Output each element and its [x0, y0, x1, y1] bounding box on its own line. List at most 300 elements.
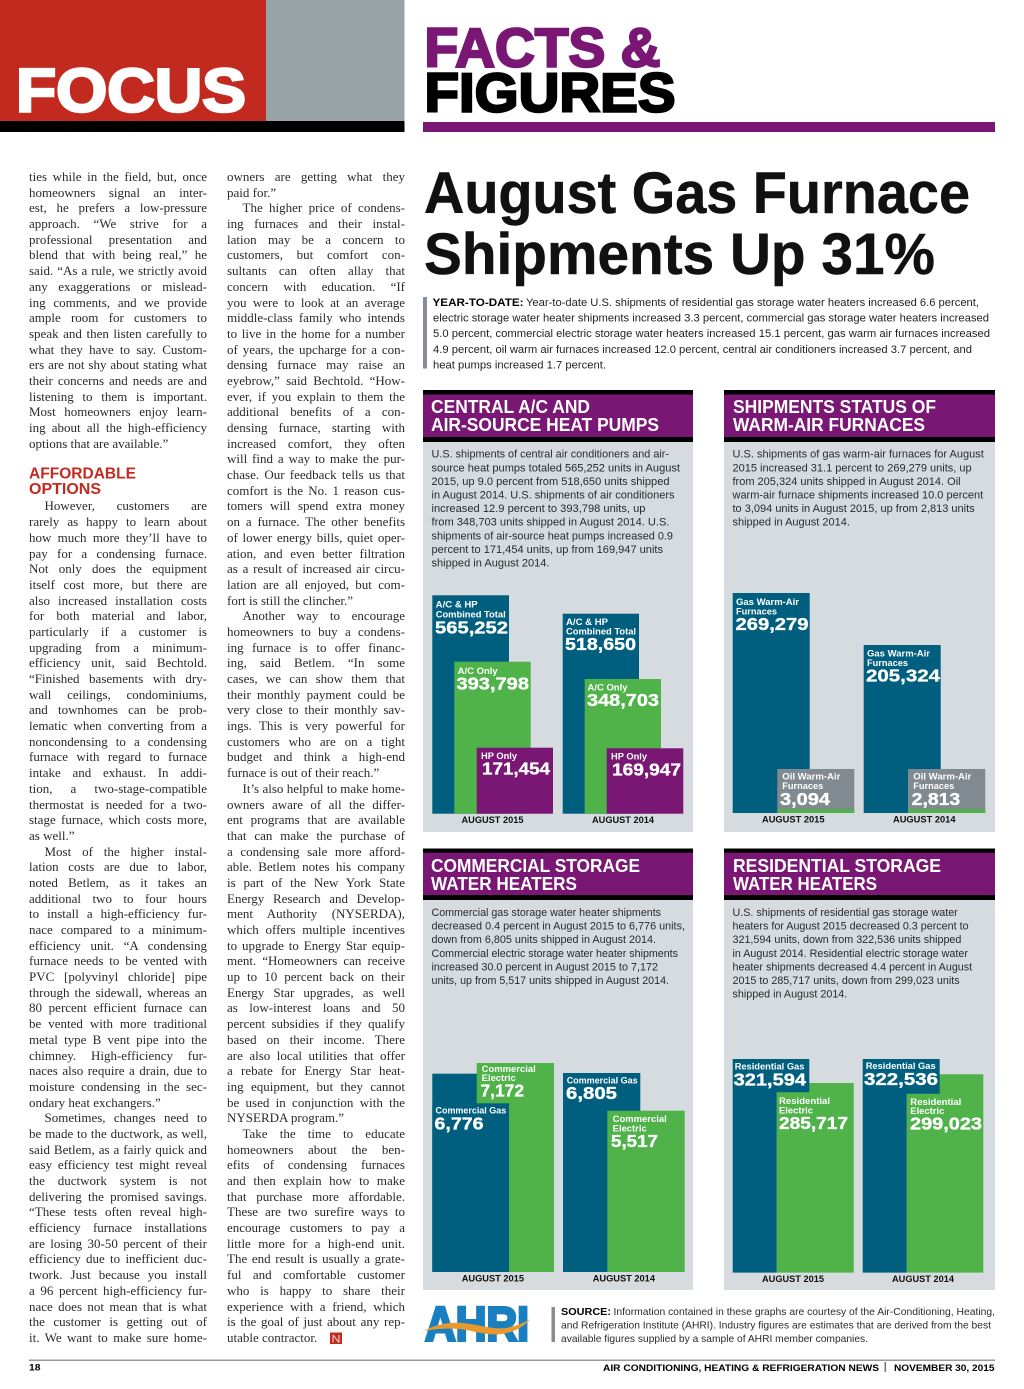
bar: HP only 2015: 171,454	[482, 758, 550, 778]
article text: column two: ment. “Homeowners can receive	[227, 953, 405, 968]
panel heading: central A/C	[423, 390, 693, 442]
bar: oil warm-air 2014	[908, 769, 985, 813]
bar: A/C only 2014: A/C Only	[588, 681, 628, 692]
article text: column two: additional benefits of a con-	[227, 404, 405, 419]
article text: column one: options that are available.”	[29, 436, 168, 451]
bar chart: August 2015 residential	[733, 1059, 854, 1284]
article text: column two: densing furnace, starting with	[227, 420, 405, 435]
article text: column two: Energy Research and Develop-	[227, 891, 405, 906]
article text: column two: very close to their monthly sav-	[227, 702, 405, 717]
bar: HP only 2015: HP Only	[481, 750, 518, 761]
subheading: Affordable Options: OPTIONS	[29, 481, 101, 498]
article text: column one: ing comments, and we provide	[29, 294, 207, 310]
article text: column two: of lower energy bills, quiet oper-	[227, 530, 405, 545]
title: August Gas Furnace	[424, 161, 970, 226]
article text: column two: paid for.”	[227, 185, 276, 200]
article text: column one: metal type B vent pipe into the	[29, 1032, 207, 1047]
article text: column one: as well.”	[29, 828, 74, 843]
article text: column two: utable contractor.	[227, 1330, 317, 1345]
panel heading: commercial storage: COMMERCIAL STORAGE	[431, 855, 640, 876]
article text: column two: to live in the home for a number	[227, 326, 405, 341]
article text: column one: Most homeowners enjoy learn-	[29, 404, 207, 419]
logo: AHRI: AHRI	[425, 1298, 529, 1352]
panel: central A/C and air-source heat pumps	[423, 390, 693, 832]
article text: column two: tomers will spend extra money	[227, 498, 405, 513]
article text: column two: ing furnace is to offer financ-	[227, 640, 405, 655]
article text: column one: delivering the promised savings.	[29, 1189, 207, 1204]
article text: column two: Another way to encourage	[242, 608, 405, 623]
article text: column one: pay for a condensing furnace.	[29, 546, 207, 561]
panel text: central A/C: in August 2014. U.S. shipments of air conditioners	[432, 490, 675, 502]
bar: residential electric 2015: 285,717	[779, 1113, 848, 1133]
text block: year-to-date summary: electric storage water heater shipments increased 3.3 percent, commercial gas storage water heaters increased	[433, 313, 989, 325]
panel text: central A/C: from 348,703 units shipped in August 2014. U.S.	[432, 517, 670, 529]
article text: column two: ful and comfortable customer	[227, 1267, 405, 1282]
bar: residential electric 2014: Residential	[910, 1096, 961, 1107]
bar chart: August 2015 furnaces: AUGUST 2015	[762, 813, 824, 824]
article text: column one: moisture condensing in the sec-	[29, 1079, 207, 1094]
article text: column two: as a result of increased air circu-	[227, 561, 405, 576]
article text: column two: ever, if you explain to them the	[227, 389, 405, 404]
panel text: central A/C: shipments of air-source heat pumps increased 0.9	[432, 530, 673, 542]
bar: gas warm-air 2014: 205,324	[866, 666, 940, 686]
article text: column one: wall ceilings, condominiums,	[29, 687, 207, 702]
panel text: commercial storage: Commercial electric storage water heater shipments	[432, 948, 678, 960]
article text: column one: the customer is getting out of	[29, 1314, 207, 1329]
article text: column one: efficiency unit, said Bechtold.	[29, 655, 207, 670]
article text: column two: ing furnaces and their instal-	[227, 216, 405, 231]
panel text: central A/C	[432, 449, 680, 570]
article text: column one: stage furnace, which costs more,	[29, 812, 207, 827]
text block: source note: Information contained in these graphs are courtesy of the Air-Conditioning, Heating,	[614, 1306, 995, 1318]
article text: column two: The end result is usually a grate-	[227, 1251, 405, 1266]
article text: column one: nace does not mean that is what	[29, 1299, 207, 1314]
article text: column two: sultants can often allay that	[227, 263, 405, 278]
panel text: residential storage: heaters for August 2015 decreased 0.3 percent to	[732, 921, 969, 933]
panel text: commercial storage: decreased 0.4 percent in August 2015 to 6,776 units,	[432, 921, 685, 933]
panel heading: residential storage: RESIDENTIAL STORAGE	[733, 855, 941, 876]
bar: A/C only 2014: 348,703	[587, 690, 659, 710]
article text: column one: lation costs are due to labor,	[29, 859, 207, 874]
panel text: warm-air furnaces: to 3,094 units in August 2015, up from 2,813 units	[732, 503, 975, 515]
article text: column two: ing, said Betlem. “In some	[227, 655, 405, 670]
panel text: warm-air furnaces: 2015 increased 31.1 percent to 269,279 units, up	[732, 462, 972, 474]
bar chart: August 2015 A/C and heat pumps	[432, 595, 553, 825]
text block: year-to-date summary	[423, 297, 990, 371]
article text: column two: ings. This is very powerful for	[227, 718, 405, 733]
bar: residential electric 2014: 299,023	[910, 1114, 982, 1134]
panel text: warm-air furnaces: warm-air furnace shipments increased 10.0 percent	[732, 490, 983, 502]
article text: column one: rarely as happy to learn about	[29, 514, 207, 529]
article text: column two: efits of condensing furnaces	[227, 1157, 405, 1172]
article text: column one: “These tests often reveal high-	[29, 1204, 207, 1219]
panel text: central A/C: source heat pumps totaled 565,252 units in August	[432, 462, 680, 474]
article text: column two: little more for a high-end unit.	[227, 1236, 405, 1251]
article text: column two: based on their income. There	[227, 1032, 405, 1047]
panel text: central A/C: shipped in August 2014.	[432, 558, 550, 570]
panel text: residential storage: in August 2014. Residential electric storage water	[732, 948, 968, 960]
article text: column one: to install a high-efficiency fur-	[29, 906, 207, 921]
bar: A/C only 2015	[454, 662, 531, 814]
article text: column one: PVC [polyvinyl chloride] pipe	[29, 969, 207, 984]
bar: commercial electric 2014: Commercial	[613, 1113, 667, 1124]
bar: HP only 2014: 169,947	[612, 760, 681, 780]
article text: column one: blend that with being real,” he	[29, 247, 207, 262]
article text: column one: Most of the higher instal-	[44, 844, 207, 859]
article text: column one: any exaggerations or mislead-	[29, 279, 207, 294]
text block: year-to-date summary: YEAR-TO-DATE:	[432, 297, 524, 309]
article text: column two: who is happy to share their	[227, 1283, 405, 1298]
text block: source note	[552, 1306, 995, 1345]
article text: column two: on a furnace. The other benefits	[227, 514, 405, 529]
article text: column two: owners aware of all the differ-	[227, 796, 405, 812]
article text: column one: what they have to say. Custom-	[29, 342, 207, 357]
article text: column two: It’s also helpful to make home-	[242, 781, 405, 796]
heading: Facts & Figures: FIGURES	[424, 62, 676, 124]
panel heading: residential storage: WATER HEATERS	[733, 873, 877, 894]
article text: column two: densing furnace may raise an	[227, 357, 405, 372]
article text: column two: their monthly payment could be	[227, 687, 405, 702]
article text: column one: for both material and labor,	[29, 608, 207, 623]
article text: column two: a condensing sale more afford-	[227, 844, 405, 859]
article text: column one: listening to them is important.	[29, 389, 207, 404]
bar: residential gas 2015	[733, 1059, 809, 1273]
article text: column two: to upgrade to Energy Star equip-	[227, 938, 405, 953]
article text: column one: ondary heat exchangers.”	[29, 1095, 161, 1110]
bar: oil warm-air 2015: 3,094	[780, 789, 830, 809]
article text: column one: tion, a two-stage-compatible	[29, 781, 207, 796]
article text: column two: ent programs that are available	[227, 812, 405, 827]
bar: commercial electric 2014: 5,517	[611, 1131, 658, 1151]
title: Shipments Up 31%	[424, 222, 935, 287]
bar: A/C and HP combined 2014	[563, 614, 639, 814]
bar: gas warm-air 2015: Furnaces	[736, 605, 777, 616]
bar: A/C and HP combined 2014: Combined Total	[566, 626, 636, 637]
article text: column one: be made to the ductwork, as well,	[29, 1126, 207, 1141]
heading: Facts & Figures: FACTS &	[424, 16, 660, 78]
bar: residential gas 2015: Residential Gas	[735, 1061, 804, 1072]
panel text: commercial storage: Commercial gas storage water heater shipments	[432, 907, 661, 919]
article text: column two: be used in conjunction with the	[227, 1095, 405, 1110]
article text: column one: be vented with more traditional	[29, 1016, 207, 1031]
bar chart: August 2014 commercial: AUGUST 2014	[593, 1272, 656, 1283]
panel text: warm-air furnaces: U.S. shipments of gas warm-air furnaces for August	[732, 449, 984, 461]
article text: column two: NYSERDA program.”	[227, 1110, 344, 1125]
article text: column two: Take the time to educate	[242, 1126, 405, 1141]
text block: year-to-date summary: heat pumps increased 1.7 percent.	[433, 359, 606, 371]
article text: column one: ing about all the high-efficiency	[29, 420, 207, 435]
article text: column one: ers are not shy about stating what	[29, 357, 207, 372]
footer: page number and publication line	[29, 1360, 995, 1373]
panel text: central A/C: increased 12.9 percent to 393,798 units, up	[432, 503, 646, 515]
article text: column one: the ductwork system is not	[29, 1173, 207, 1188]
article text: column two: encourage customers to pay a	[227, 1220, 405, 1235]
article text: column two: homeowners about the ben-	[227, 1142, 405, 1157]
panel text: residential storage: 321,594 units, down from 322,536 units shipped	[732, 934, 961, 946]
panel heading: central A/C: AIR-SOURCE HEAT PUMPS	[431, 414, 659, 435]
bar chart: August 2014 furnaces	[864, 645, 985, 824]
panel text: central A/C: 2015, up 9.0 percent from 518,650 units shipped	[432, 476, 670, 488]
text block: year-to-date summary: 4.9 percent, oil warm air furnaces increased 12.0 percent, central air conditioners increased 3.7 percent, and	[433, 344, 972, 356]
article text: column two: and then explain how to make	[227, 1173, 405, 1188]
article text: column one: particularly if a customer is	[29, 624, 207, 639]
bar: commercial gas 2014: 6,805	[566, 1083, 617, 1103]
panel text: warm-air furnaces	[732, 449, 984, 529]
article text: column one: also increased installation costs	[29, 593, 207, 608]
text block: year-to-date summary: 5.0 percent, commercial electric storage water heaters increased 15.1 percent, gas warm air furnaces increased	[433, 328, 990, 340]
article text: column one: thermostat is needed for a two-	[29, 797, 207, 812]
article text: column one: efficiency furnace installations	[29, 1220, 207, 1235]
bar: oil warm-air 2014: Oil Warm-Air	[913, 770, 972, 781]
article text: column one: said Betlem, as a fairly quick and	[29, 1142, 207, 1157]
footer: page number and publication line: AIR CONDITIONING, HEATING & REFRIGERATION NEWS	[603, 1362, 879, 1373]
panel text: residential storage: 2015 to 285,717 units, down from 299,023 units	[732, 975, 960, 987]
article text: column two: cases, we can show them that	[227, 671, 405, 686]
bar: A/C and HP combined 2015	[432, 595, 509, 814]
article text: column two: you were to look at an average	[227, 294, 405, 310]
bar: commercial gas 2014	[563, 1073, 640, 1272]
bar: HP only 2014: HP Only	[611, 751, 648, 762]
article text: column two: These are two surefire ways to	[227, 1204, 405, 1219]
bar: gas warm-air 2014: Gas Warm-Air	[867, 648, 930, 659]
bar: commercial electric 2014	[607, 1111, 685, 1272]
bar: commercial gas 2015	[432, 1103, 509, 1272]
subheading: Affordable Options	[29, 465, 136, 498]
text block: source note: available figures supplied by a sample of AHRI member companies.	[561, 1333, 868, 1345]
panel heading: residential storage	[724, 848, 995, 900]
panel: residential storage water heaters	[724, 848, 995, 1290]
panel text: warm-air furnaces: shipped in August 2014.	[732, 517, 850, 529]
heading: Facts & Figures	[423, 16, 995, 132]
article text: column two: middle-class family who intends	[227, 310, 405, 325]
bar: commercial electric 2015: Electric	[482, 1072, 516, 1083]
bar: A/C and HP combined 2014: 518,650	[565, 634, 636, 654]
bar chart: August 2014 residential	[863, 1059, 983, 1284]
panel text: residential storage: heater shipments decreased 4.4 percent in August	[732, 961, 972, 973]
panel text: warm-air furnaces: from 205,324 units shipped in August 2014. Oil	[732, 476, 961, 488]
article text: column one: said. “As a rule, we strictly avoid	[29, 263, 207, 278]
article text: column one: efficiency due to inefficient duc-	[29, 1251, 207, 1266]
article text: column two: will find a way to make the pur-	[227, 451, 405, 466]
footer: page number and publication line: NOVEMBER 30, 2015	[894, 1362, 994, 1373]
bar chart: August 2015 A/C and heat pumps: AUGUST 2015	[462, 814, 524, 825]
article text: column one: professional presentation and	[29, 232, 207, 247]
text block: source note: and Refrigeration Institute (AHRI). Industry figures are estimates that are derived from the best	[561, 1320, 991, 1332]
bar: oil warm-air 2014: Furnaces	[913, 780, 954, 791]
panel: shipments status of warm-air furnaces	[724, 390, 995, 832]
bar chart: August 2014 A/C and heat pumps	[563, 614, 683, 825]
subheading: Affordable Options: AFFORDABLE	[29, 465, 136, 482]
article text: column one: chimney. High-efficiency fur-	[29, 1048, 207, 1063]
article text: column one: intake and exhaust. In addi-	[29, 765, 207, 780]
article text: column two: ation, and even better filtration	[227, 546, 405, 560]
article text: column two: lation may be a concern to	[227, 232, 405, 247]
article text: column one: naces also require a drain, due to	[29, 1063, 207, 1078]
bar: residential gas 2015: 321,594	[734, 1070, 806, 1090]
article text: column one: noted Betlem, as it takes an	[29, 875, 207, 890]
bar: HP only 2015	[477, 748, 553, 814]
bar chart: August 2014 furnaces: AUGUST 2014	[893, 813, 956, 824]
article text: column two: customers who are on a tight	[227, 734, 405, 749]
panel text: residential storage: shipped in August 2014.	[732, 989, 847, 1001]
banner: FOCUS section tab	[0, 0, 404, 132]
article text: column one: ample room for customers to	[29, 310, 207, 325]
bar: commercial electric 2015	[477, 1063, 554, 1272]
panel text: residential storage	[732, 907, 972, 1001]
article text: column two: a rebate for Energy Star heat-	[227, 1063, 405, 1078]
bar: residential gas 2014: 322,536	[864, 1069, 938, 1089]
article text: column two: owners are getting what they	[227, 169, 405, 184]
bar chart: August 2014 A/C and heat pumps: AUGUST 2014	[592, 814, 655, 825]
bar: residential gas 2014	[863, 1059, 940, 1273]
bar: gas warm-air 2015: 269,279	[736, 614, 809, 634]
footer: page number and publication line: 18	[29, 1362, 40, 1372]
bar: oil warm-air 2014: 2,813	[912, 789, 961, 809]
article text: column one: nace compared to a minimum-	[29, 922, 207, 937]
article text: column one: their concerns and needs are and	[29, 373, 207, 388]
article text: column one: ties while in the field, but, once	[29, 169, 207, 184]
article text: column one: speak and then listen carefully to	[29, 326, 207, 341]
article text: column two: concern with education. “If	[227, 279, 405, 294]
bar chart: August 2015 residential: AUGUST 2015	[762, 1273, 824, 1284]
bar: residential electric 2014: Electric	[910, 1105, 944, 1116]
bar: HP only 2014	[607, 748, 683, 814]
bar: oil warm-air 2015: Oil Warm-Air	[782, 770, 841, 781]
article text: column two: The higher price of condens-	[242, 200, 405, 215]
panel text: commercial storage: increased 30.0 percent in August 2015 to 7,172	[432, 961, 658, 973]
bar: oil warm-air 2015: Furnaces	[782, 780, 823, 791]
article text: column two: fort is still the clincher.”	[227, 593, 353, 608]
article text: column one: it. We want to make sure home-	[29, 1330, 207, 1345]
panel: commercial storage water heaters	[423, 848, 693, 1290]
article text: column one	[29, 169, 207, 1345]
article text: column two: increased comfort, they often	[227, 436, 405, 451]
bar: A/C and HP combined 2014: A/C & HP	[566, 616, 608, 627]
bar chart: August 2014 residential: AUGUST 2014	[892, 1273, 955, 1284]
article text: column two: which offers multiple incentives	[227, 922, 405, 937]
panel text: commercial storage: units, up from 5,517 units shipped in August 2014.	[432, 975, 669, 987]
article text: column two: lation are all enjoyed, but com-	[227, 577, 405, 592]
article text: column one: est, he prefers a low-pressure	[29, 200, 207, 215]
article text: column one: efficiency unit. “A condensing	[29, 938, 207, 953]
article text: column one: and townhomes can be prob-	[29, 702, 207, 717]
panel text: central A/C: U.S. shipments of central air conditioners and air-	[432, 449, 669, 461]
bar: gas warm-air 2014	[864, 645, 941, 813]
bar: residential gas 2014: Residential Gas	[866, 1060, 936, 1071]
bar chart: August 2014 commercial	[563, 1073, 685, 1283]
article text: column two: eyebrow,” said Bechtold. “How-	[227, 373, 405, 388]
article text: column one: how much more they’ll have to	[29, 530, 207, 545]
bar: A/C only 2014	[585, 679, 661, 814]
panel text: commercial storage: down from 6,805 units shipped in August 2014.	[432, 934, 656, 946]
article text: column one: furnace with regard to furnace	[29, 749, 207, 764]
article text: column two: percent subsidies if they qualify	[227, 1016, 405, 1031]
article text: column one: through the sidewall, whereas an	[29, 985, 207, 1000]
article text: column two: Energy Star upgrades, as well	[227, 985, 405, 1000]
bar: A/C and HP combined 2015: Combined Total	[436, 609, 506, 620]
bar: gas warm-air 2015	[733, 593, 810, 813]
article text: column one: are losing 30-50 percent of their	[29, 1236, 207, 1251]
article text: column two: are also local utilities that offer	[227, 1048, 405, 1062]
article text: column one: a 96 percent high-efficiency fur-	[29, 1283, 207, 1298]
article text: column two: customers, but comfort con-	[227, 247, 405, 262]
article text: column one: twork. Just because you install	[29, 1267, 207, 1282]
bar: A/C and HP combined 2015: 565,252	[435, 617, 508, 637]
article text: column two: that can make the purchase of	[227, 828, 405, 843]
article text: column one: 80 percent efficient furnace can	[29, 1000, 207, 1015]
panel heading: central A/C: CENTRAL A/C AND	[431, 396, 590, 417]
article text: column one: Not only does the equipment	[29, 561, 207, 576]
bar chart: August 2015 furnaces	[733, 593, 854, 824]
panel heading: commercial storage: WATER HEATERS	[431, 873, 577, 894]
article text: column two: ment Authority (NYSERDA),	[227, 906, 405, 921]
text block: source note: SOURCE:	[561, 1306, 611, 1318]
bar: oil warm-air 2015	[777, 769, 854, 813]
article text: column one: upgrading from a minimum-	[29, 640, 207, 655]
panel heading: commercial storage	[423, 848, 693, 900]
icon: News end mark	[330, 1332, 342, 1346]
banner: FOCUS section tab: FOCUS	[16, 56, 246, 124]
panel heading: warm-air furnaces: WARM-AIR FURNACES	[733, 414, 925, 435]
article text: column two: ing equipment, but they cannot	[227, 1079, 405, 1094]
icon: News end mark: N	[332, 1334, 341, 1346]
article text: column two: is the goal of just about any rep-	[227, 1314, 405, 1329]
bar: commercial electric 2015: 7,172	[480, 1081, 524, 1101]
bar: residential electric 2015: Residential	[779, 1095, 830, 1106]
bar chart: August 2015 commercial: AUGUST 2015	[462, 1272, 524, 1283]
bar: residential electric 2014	[907, 1074, 983, 1273]
bar: commercial gas 2014: Commercial Gas	[567, 1074, 638, 1085]
panel text: commercial storage	[432, 907, 685, 987]
article text: column one: However, customers are	[44, 498, 207, 513]
article text: column one: itself cost more, but there are	[29, 577, 207, 592]
panel heading: warm-air furnaces	[724, 390, 995, 442]
bar: commercial gas 2015: 6,776	[434, 1113, 484, 1133]
article text: column two: of years, the upcharge for a con-	[227, 342, 405, 357]
article text: column one: noncondensing to a condensing	[29, 734, 207, 749]
bar chart: August 2015 commercial	[432, 1063, 554, 1283]
text block: year-to-date summary: Year-to-date U.S. shipments of residential gas storage water heaters increased 6.6 percent,	[526, 297, 979, 309]
article text: column one: easy efficiency test might reveal	[29, 1157, 207, 1172]
bar: commercial gas 2015: Commercial Gas	[436, 1105, 506, 1116]
article text: column two: that purchase more affordable.	[227, 1189, 405, 1204]
bar: commercial electric 2014: Electric	[613, 1122, 647, 1133]
panel heading: warm-air furnaces: SHIPMENTS STATUS OF	[733, 396, 936, 417]
article text: column one: homeowners signal an inter-	[29, 185, 207, 200]
article text: column two: able. Betlem notes his company	[227, 859, 405, 874]
bar: A/C only 2015: 393,798	[456, 673, 529, 693]
bar: A/C and HP combined 2015: A/C & HP	[436, 599, 478, 610]
bar: gas warm-air 2015: Gas Warm-Air	[736, 596, 799, 607]
panel text: residential storage: U.S. shipments of residential gas storage water	[732, 907, 958, 919]
panel text: central A/C: percent to 171,454 units, up from 169,947 units	[432, 544, 664, 556]
bar: gas warm-air 2014: Furnaces	[867, 657, 908, 668]
article text: column two: chase. Our feedback tells us that	[227, 467, 405, 482]
article text: column two: budget and think a high-end	[227, 749, 405, 764]
bar: residential electric 2015	[777, 1083, 854, 1273]
article text: column two: up to 10 percent back on their	[227, 969, 405, 984]
article text: column one: Sometimes, changes need to	[44, 1110, 207, 1125]
article text: column one: furnace needs to be vented with	[29, 953, 207, 968]
bar: residential electric 2015: Electric	[779, 1104, 813, 1115]
title	[424, 161, 970, 287]
article text: column two	[227, 169, 405, 1345]
article text: column one: approach. “We strive for a	[29, 216, 207, 231]
bar: A/C only 2015: A/C Only	[458, 665, 498, 676]
article text: column two: comfort is the No. 1 reason cus-	[227, 483, 405, 498]
article text: column one: lematic when converting from a	[29, 718, 207, 733]
article text: column one: additional two to four hours	[29, 891, 207, 906]
